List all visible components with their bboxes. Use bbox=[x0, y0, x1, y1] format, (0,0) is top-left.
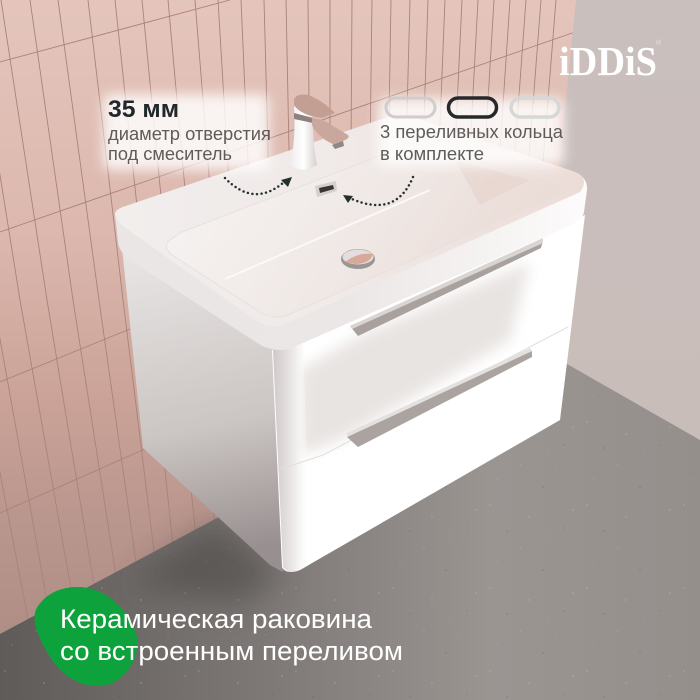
headline line 1: Керамическая раковина bbox=[60, 604, 372, 634]
sink top deck bbox=[115, 116, 584, 326]
sink basin bbox=[166, 148, 562, 317]
faucet collar bbox=[294, 113, 313, 123]
logo: iDDiS bbox=[559, 38, 657, 84]
pink tile wall bbox=[0, 0, 590, 660]
faucet bbox=[290, 95, 349, 170]
caption: hole diameter: диаметр отверстия bbox=[108, 124, 271, 144]
arrow: left side to faucet hole bbox=[225, 177, 292, 194]
bottom headline bbox=[60, 604, 403, 666]
arrow: right side to overflow bbox=[343, 177, 413, 205]
white glow behind left caption bbox=[103, 94, 269, 170]
three overflow rings bbox=[386, 98, 559, 117]
heading: 35 mm: 35 мм bbox=[108, 96, 179, 123]
white glow behind right caption bbox=[378, 98, 564, 166]
floor bbox=[0, 364, 700, 700]
basin crease bbox=[225, 190, 430, 279]
upper drawer reflection bbox=[300, 262, 530, 455]
ring: black bbox=[448, 98, 496, 117]
basin reflection bbox=[455, 160, 530, 205]
caption: three rings: 3 переливных кольца bbox=[380, 122, 564, 142]
vanity cabinet bbox=[122, 215, 585, 572]
caption: included: в комплекте bbox=[380, 144, 484, 164]
faucet upper lever bbox=[294, 95, 335, 118]
right beige wall bbox=[540, 0, 700, 440]
faucet lower lever bbox=[312, 118, 349, 145]
drain bbox=[341, 249, 375, 269]
overflow hole bbox=[315, 181, 337, 197]
headline line 2: со встроенным переливом bbox=[60, 636, 403, 666]
faucet body bbox=[290, 106, 317, 170]
cabinet shadow on floor bbox=[130, 520, 285, 605]
lower handle bbox=[347, 348, 532, 447]
faucet aerator bbox=[332, 141, 344, 149]
ring: white bbox=[511, 98, 559, 117]
green blob bbox=[35, 587, 138, 686]
rounded front corner bbox=[273, 337, 310, 572]
ceramic sink bbox=[115, 116, 587, 350]
cabinet side panel bbox=[122, 248, 283, 572]
right caption bbox=[380, 122, 564, 164]
sink outer lip bbox=[115, 116, 587, 350]
caption: for mixer: под смеситель bbox=[108, 144, 232, 164]
upper handle bbox=[350, 238, 543, 336]
left caption bbox=[108, 96, 271, 164]
cabinet front bbox=[272, 215, 585, 572]
drawer gap bbox=[278, 327, 568, 470]
ring: chrome bbox=[386, 98, 435, 117]
registered mark: ® bbox=[656, 39, 662, 47]
